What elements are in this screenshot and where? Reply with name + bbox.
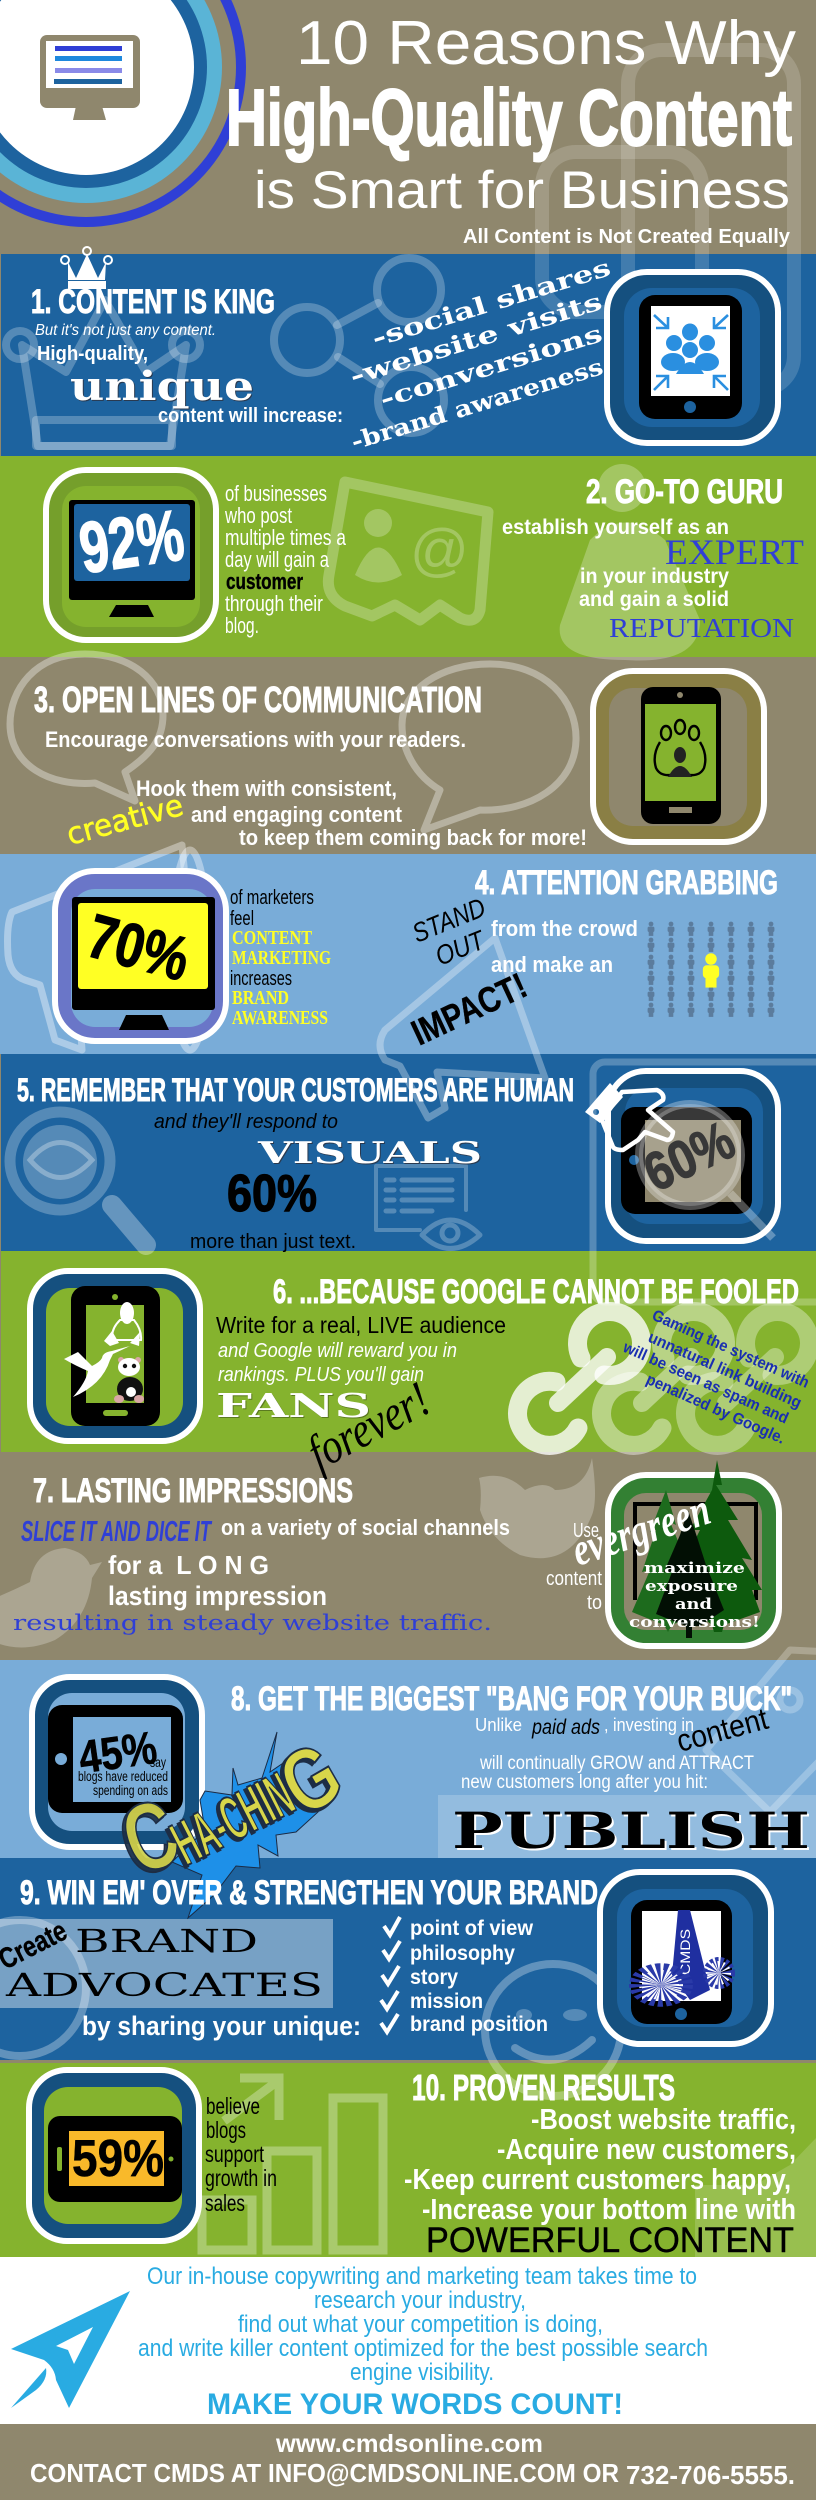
- icon: tablet with 45%: [32, 1677, 202, 1847]
- checklist: mission: [410, 1990, 483, 2013]
- icon: faint check box: [695, 2138, 816, 2257]
- callouts: IMPACT!: [405, 965, 533, 1053]
- stat caption: spending on ads: [93, 1783, 168, 1798]
- text block: stat caption: CONTENT: [232, 927, 313, 949]
- text block: stat caption: BRAND: [232, 987, 289, 1009]
- text block: forever!: [298, 1370, 439, 1481]
- panel: 2 go-to guru: [46, 464, 804, 660]
- checklist: story: [410, 1966, 458, 1989]
- text block: Encourage conversations with your readers.: [45, 727, 466, 752]
- stat: 92%: [75, 495, 189, 589]
- text block: stat caption: growth in: [205, 2165, 277, 2191]
- results list: POWERFUL CONTENT: [426, 2221, 794, 2260]
- text block: on a variety of social channels: [221, 1515, 510, 1540]
- text block: lasting impression: [108, 1581, 327, 1611]
- icon: faint contact card: @: [410, 518, 469, 583]
- icon: faint left megaphone: [8, 845, 208, 1050]
- text block: stat caption: [205, 2093, 277, 2216]
- icon: faint meditating figure: [560, 464, 700, 660]
- checklist: philosophy: [410, 1942, 515, 1965]
- text block: stat caption: increases: [230, 968, 292, 990]
- subtitle: All Content is Not Created Equally: [463, 226, 791, 248]
- checklist: brand position: [410, 2013, 548, 2036]
- panel: 4 attention grabbing: [8, 845, 778, 1118]
- text block: Our in-house copywriting and marketing team takes time to: [147, 2263, 697, 2290]
- icon: concentric circles: [0, 0, 246, 227]
- icon: dark centre tree: [656, 1510, 724, 1638]
- text block: and write killer content optimized for the best possible search: [138, 2335, 708, 2362]
- text block: FANS: [216, 1386, 371, 1425]
- text block: engine visibility.: [350, 2359, 494, 2386]
- callout: brand advocates: ADVOCATES: [4, 1966, 323, 2004]
- heading: 9. WIN EM' OVER & STRENGTHEN YOUR BRAND: [20, 1874, 598, 1912]
- text block: stat caption: multiple times a: [225, 525, 347, 550]
- icon: faint chain links: [518, 1311, 810, 1445]
- text block: and gain a solid: [579, 588, 729, 611]
- text block: SLICE IT AND DICE IT: [21, 1516, 212, 1548]
- rotated list: -website visits: [346, 286, 605, 391]
- icon: pom-poms: [647, 1965, 727, 1995]
- text block: stat caption: blog.: [225, 613, 259, 638]
- icon: panda: [114, 1357, 144, 1403]
- cha-ching lettering: [109, 1723, 358, 1896]
- text block: resulting in steady website traffic.: [13, 1611, 492, 1635]
- stat: 70%: [80, 902, 196, 995]
- heading: 7. LASTING IMPRESSIONS: [33, 1472, 353, 1510]
- text block: paid ads: [531, 1716, 600, 1739]
- icon: faint device outlines: [542, 50, 794, 390]
- icon: monitor with evergreen trees: [608, 1460, 779, 1646]
- text block: [216, 1312, 506, 1481]
- contact line: CONTACT CMDS AT INFO@CMDSONLINE.COM OR: [30, 2458, 619, 2488]
- cha-ching lettering: G: [263, 1723, 358, 1834]
- callouts: OUT: [431, 924, 491, 972]
- text block: find out what your competition is doing,: [238, 2311, 603, 2338]
- panel: closing message: [11, 2263, 708, 2421]
- text block: stat caption: sales: [205, 2190, 245, 2216]
- stat: 59%: [72, 2130, 164, 2188]
- callouts: STAND: [408, 892, 490, 949]
- icon: pointing hand: [602, 1090, 673, 1150]
- cha-ching lettering: C: [109, 1778, 192, 1896]
- callouts: [405, 892, 638, 1053]
- text block: REPUTATION: [609, 613, 794, 643]
- panel: footer contact: [30, 2430, 795, 2490]
- title: is Smart for Business: [254, 161, 790, 220]
- callout: brand advocates: [0, 1915, 333, 2008]
- website: www.cmdsonline.com: [275, 2430, 543, 2458]
- text block: evergreen note: conversions!: [629, 1613, 760, 1631]
- icon: hummingbird: [64, 1346, 130, 1397]
- checklist: [381, 1917, 548, 2036]
- icon: tablet with cheer megaphone: [600, 1872, 771, 2044]
- text block: stat caption: [224, 481, 347, 638]
- panel: header: [0, 0, 796, 390]
- icon: faint smileys: [0, 1920, 621, 2096]
- text block: Unlike: [475, 1715, 522, 1735]
- text block: and engaging content: [191, 802, 403, 827]
- icon: cha-ching burst: [109, 1723, 358, 1918]
- text block: [461, 1701, 772, 1793]
- stat caption: say: [150, 1755, 166, 1770]
- text block: evergreen note: evergreen: [565, 1483, 716, 1576]
- callouts: and make an: [491, 952, 613, 977]
- callouts: from the crowd: [491, 916, 638, 941]
- panel: 9 win em over: [0, 1872, 771, 2096]
- text block: VISUALS: [257, 1136, 482, 1171]
- text block: EXPERT: [665, 532, 804, 572]
- checklist: point of view: [410, 1917, 534, 1940]
- text block: evergreen note: to: [587, 1592, 602, 1614]
- text block: content will increase:: [158, 405, 343, 427]
- cha-ching lettering: HA-CHIN: [161, 1760, 305, 1878]
- icon: phone with animals: [30, 1271, 200, 1441]
- text block: stat caption: AWARENESS: [232, 1007, 328, 1029]
- text block: stat caption: support: [205, 2141, 264, 2167]
- text block: by sharing your unique:: [82, 2011, 361, 2041]
- text block: stat caption: feel: [230, 908, 254, 930]
- text block: evergreen note: Use: [573, 1520, 599, 1542]
- rotated list: -brand awareness: [348, 353, 606, 456]
- text block: Write for a real, LIVE audience: [216, 1312, 506, 1338]
- icon: faint price tag: [706, 1650, 816, 1812]
- icon: faint share symbol: [274, 258, 444, 433]
- call to action: MAKE YOUR WORDS COUNT!: [207, 2388, 623, 2421]
- stat caption: [78, 1755, 168, 1798]
- text block: creative: [63, 788, 187, 853]
- icon: penguin: [104, 1302, 141, 1346]
- rotated note: penalized by Google.: [643, 1371, 787, 1448]
- text block: [502, 516, 804, 643]
- text block: [13, 1515, 510, 1635]
- heading: 1. CONTENT IS KING: [31, 283, 275, 321]
- rotated list: [346, 252, 614, 456]
- results list: [404, 2104, 796, 2260]
- icon: faint bar chart: [202, 2078, 383, 2250]
- chart: crowd of people with one highlighted: [648, 922, 774, 1017]
- text block: and Google will reward you in: [218, 1340, 457, 1362]
- text block: more than just text.: [190, 1231, 356, 1253]
- panel: 1 content is king: [6, 247, 778, 456]
- text block: , investing in: [604, 1715, 694, 1735]
- text block: rankings. PLUS you'll gain: [218, 1364, 424, 1386]
- icon: monitor with 70%: [55, 871, 226, 1041]
- panel: 10 proven results: [29, 2067, 816, 2260]
- panel: 7 lasting impressions: [0, 1458, 779, 1648]
- text block: content: [673, 1701, 772, 1759]
- stat caption: blogs have reduced: [78, 1769, 168, 1784]
- callout: publish: PUBLISH: [452, 1801, 810, 1860]
- text block: evergreen note: exposure: [645, 1577, 738, 1595]
- panel: 5 customers are human: [10, 1062, 816, 1302]
- text block: Hook them with consistent,: [136, 776, 397, 801]
- text block: But it's not just any content.: [35, 322, 216, 339]
- rotated note: will be seen as spam and: [620, 1339, 791, 1427]
- text block: stat caption: of businesses: [225, 481, 327, 506]
- icon: faint document with eye: [376, 1166, 480, 1248]
- icon: phone with people: [593, 671, 764, 842]
- icon: right tree: [680, 1460, 762, 1632]
- icon: phone with 59%: [29, 2070, 199, 2241]
- stat: 60%: [635, 1110, 744, 1203]
- text block: evergreen note: maximize: [644, 1559, 745, 1577]
- phone number: 732-706-5555.: [626, 2460, 795, 2490]
- icon: faint right megaphone: [380, 938, 545, 1118]
- text block: for a L O N G: [108, 1550, 269, 1580]
- text block: [154, 1111, 482, 1253]
- callout: brand advocates: BRAND: [75, 1922, 258, 1960]
- rotated note: [620, 1307, 812, 1448]
- icon: faint birds: [0, 1458, 595, 1648]
- icon: paper plane: [11, 2291, 130, 2408]
- icon: faint magnifier with eye: [10, 1112, 146, 1245]
- text block: stat caption: [230, 887, 331, 1029]
- title: 10 Reasons Why: [296, 9, 796, 78]
- text block: and they'll respond to: [154, 1111, 338, 1133]
- text block: evergreen note: and: [675, 1595, 713, 1613]
- icon: faint contact card: [328, 482, 488, 620]
- text block: 60%: [227, 1165, 317, 1223]
- rotated list: -social shares: [368, 252, 614, 353]
- icon: left tree: [632, 1490, 700, 1632]
- text block: [45, 727, 587, 853]
- rotated note: unnatural link building: [645, 1329, 804, 1412]
- heading: 3. OPEN LINES OF COMMUNICATION: [34, 679, 482, 720]
- icon: desktop monitor: [40, 35, 140, 120]
- rotated list: -conversions: [376, 318, 606, 414]
- text block: stat caption: of marketers: [230, 887, 314, 909]
- icon: monitor with 92%: [46, 470, 216, 640]
- title: [226, 9, 796, 220]
- text block: establish yourself as an: [502, 516, 729, 539]
- callout: publish: [438, 1795, 816, 1860]
- text block: unique: [70, 363, 254, 410]
- text block: stat caption: customer: [226, 569, 303, 594]
- text block: research your industry,: [314, 2287, 526, 2314]
- panel: 8 bang for your buck: [32, 1650, 816, 1860]
- icon: crown: [61, 247, 112, 289]
- text block: new customers long after you hit:: [461, 1772, 708, 1793]
- text block: stat caption: believe: [206, 2093, 260, 2119]
- text block: stat caption: day will gain a: [225, 547, 330, 572]
- text block: in your industry: [580, 565, 729, 588]
- heading: 10. PROVEN RESULTS: [412, 2067, 675, 2108]
- panel: 3 open lines of communication: [10, 654, 764, 853]
- icon: faint crown: [6, 300, 200, 446]
- icon: tablet with cheer megaphone: CMDS: [677, 1929, 693, 1975]
- text block: will continually GROW and ATTRACT: [479, 1753, 754, 1774]
- text block: [138, 2263, 708, 2386]
- icon: faint speech bubbles: [10, 654, 576, 830]
- text block: stat caption: who post: [224, 503, 292, 528]
- text block: to keep them coming back for more!: [239, 825, 587, 850]
- text block: stat caption: blogs: [206, 2117, 246, 2143]
- icon: tablet with 60% and pointing hand: [585, 1062, 816, 1302]
- text block: [35, 322, 343, 427]
- text block: evergreen note: [546, 1483, 760, 1631]
- text block: evergreen note: content: [546, 1568, 602, 1590]
- text block: High-quality,: [37, 343, 148, 365]
- text block: stat caption: through their: [225, 591, 323, 616]
- stat: 45%: [76, 1721, 160, 1783]
- icon: tablet with people: [607, 272, 778, 443]
- text block: stat caption: MARKETING: [232, 947, 331, 969]
- panel: 6 google cannot be fooled: [30, 1271, 812, 1481]
